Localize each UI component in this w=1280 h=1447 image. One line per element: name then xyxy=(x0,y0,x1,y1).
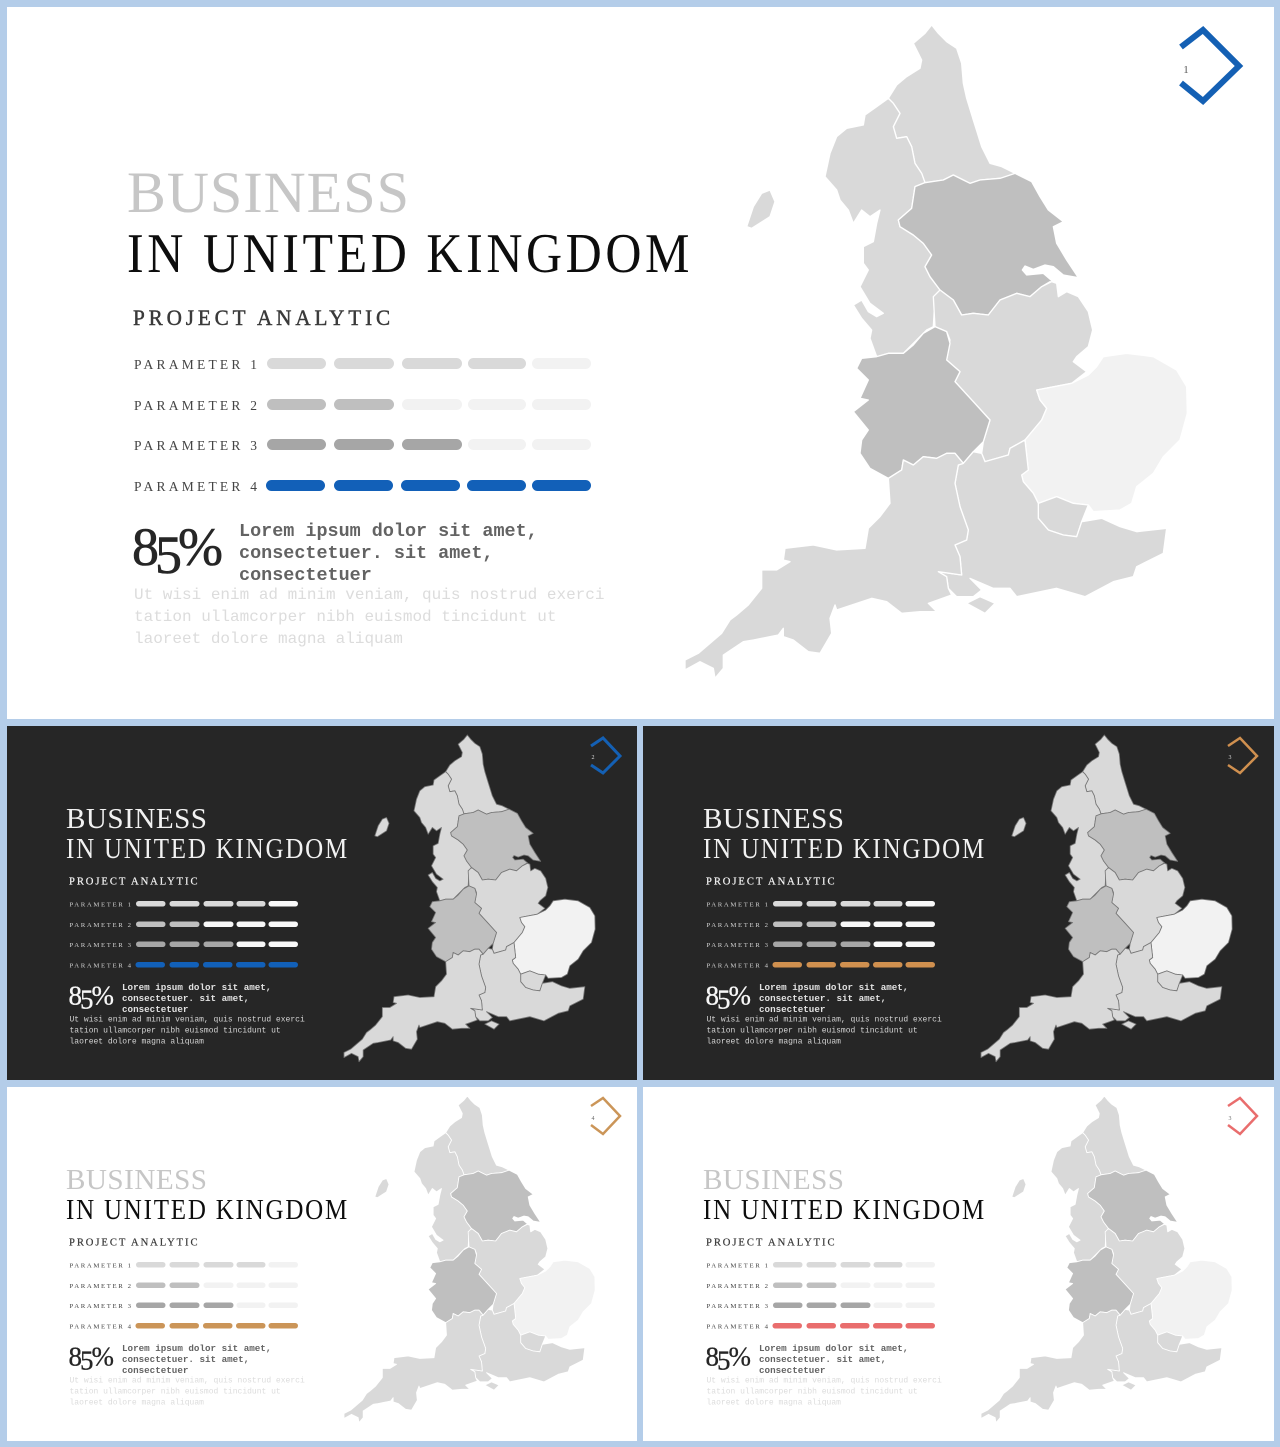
text block: light orange content xyxy=(66,1164,349,1408)
icon: diamond marker 4: 4 xyxy=(592,1116,594,1122)
lorem text xyxy=(239,521,538,586)
parameter 4 row: PARAMETER 4 xyxy=(134,479,257,494)
title xyxy=(703,803,986,865)
region: south east xyxy=(938,440,1167,597)
parameter 1 row xyxy=(70,1262,298,1270)
region: london xyxy=(1038,497,1088,537)
body text: Ut wisi enim ad minim veniam, quis nostrud exerci xyxy=(134,586,604,604)
text block: dark blue content xyxy=(66,803,349,1046)
parameter 2 row xyxy=(134,398,591,413)
parameter 3 row: PARAMETER 3 xyxy=(70,942,132,949)
panel: dark slide orange xyxy=(643,726,1274,1080)
parameter 4 row xyxy=(134,479,591,494)
title xyxy=(127,160,693,285)
stat: 85%: 5 xyxy=(80,1346,94,1376)
icon: diamond marker 3: 3 xyxy=(1228,755,1232,761)
parameter 1 row xyxy=(70,901,298,908)
body text: Ut wisi enim ad minim veniam, quis nostrud exerci xyxy=(706,1376,942,1386)
region: north west xyxy=(825,98,940,357)
panel: main white slide xyxy=(7,7,1274,719)
icon: diamond marker 2 xyxy=(591,738,620,773)
parameter 4 row: PARAMETER 4 xyxy=(70,1324,132,1330)
stat: 85%: % xyxy=(92,980,114,1010)
title: BUSINESS xyxy=(127,160,410,225)
lorem text: consectetuer. sit amet, xyxy=(122,993,249,1004)
region: yorkshire xyxy=(898,173,1078,315)
panel: light slide orange xyxy=(7,1087,637,1441)
map: light red xyxy=(981,1096,1232,1423)
region: east of england xyxy=(1022,353,1187,512)
parameter 2 row xyxy=(70,1282,298,1290)
icon: diamond marker 1: 1 xyxy=(1183,64,1189,76)
title: BUSINESS xyxy=(66,1164,208,1196)
icon: diamond marker 4 xyxy=(591,1098,620,1134)
body text xyxy=(70,1016,305,1046)
title xyxy=(703,1164,986,1226)
icon: diamond marker 5 xyxy=(1228,1098,1257,1134)
stat: 85%: 5 xyxy=(717,984,730,1014)
parameter 1 row: PARAMETER 1 xyxy=(70,1262,131,1270)
stat: 85%: 5 xyxy=(80,984,94,1014)
title xyxy=(66,803,349,865)
body text: tation ullamcorper nibh euismod tincidunt ut xyxy=(706,1026,918,1036)
parameter 2 row: PARAMETER 2 xyxy=(134,398,257,413)
lorem text xyxy=(759,982,908,1015)
map of England regions xyxy=(685,25,1187,678)
body text: Ut wisi enim ad minim veniam, quis nostrud exerci xyxy=(706,1016,942,1024)
parameter 2 row: PARAMETER 2 xyxy=(706,1283,768,1290)
parameter 1 row: PARAMETER 1 xyxy=(70,902,131,908)
region: west midlands xyxy=(853,327,990,478)
heading: project analytic: PROJECT ANALYTIC xyxy=(133,305,394,330)
lorem text: consectetuer. sit amet, xyxy=(759,993,886,1004)
stat: 85%: % xyxy=(178,517,223,577)
title: IN UNITED KINGDOM xyxy=(703,1195,986,1226)
parameter 4 row xyxy=(706,1323,935,1330)
region: north east xyxy=(888,25,1015,183)
parameter 3 row xyxy=(706,942,935,949)
parameter 2 row: PARAMETER 2 xyxy=(70,1283,131,1290)
body text: laoreet dolore magna aliquam xyxy=(706,1038,841,1046)
body text xyxy=(706,1376,942,1408)
parameter 4 row: PARAMETER 4 xyxy=(70,962,132,970)
text block: light red content xyxy=(703,1164,986,1408)
heading: project analytic: PROJECT ANALYTIC xyxy=(706,1236,836,1248)
stat: 85%: 8 xyxy=(706,980,719,1010)
title xyxy=(66,1164,349,1226)
region: south west xyxy=(685,453,968,678)
parameter 1 row: PARAMETER 1 xyxy=(706,1262,768,1270)
text block: analytic content xyxy=(127,160,693,648)
lorem text: Lorem ipsum dolor sit amet, xyxy=(239,521,538,542)
parameter 1 row: PARAMETER 1 xyxy=(706,902,768,908)
parameter 2 row xyxy=(706,1282,935,1290)
title: IN UNITED KINGDOM xyxy=(127,223,693,285)
lorem text: Lorem ipsum dolor sit amet, xyxy=(122,1343,271,1354)
parameter 3 row xyxy=(706,1302,935,1310)
title: IN UNITED KINGDOM xyxy=(66,834,349,865)
heading: project analytic: PROJECT ANALYTIC xyxy=(69,876,200,888)
lorem text: consectetuer xyxy=(759,1365,825,1376)
parameter 2 row xyxy=(706,922,935,929)
lorem text: Lorem ipsum dolor sit amet, xyxy=(122,982,271,993)
body text: tation ullamcorper nibh euismod tincidunt ut xyxy=(70,1388,281,1396)
body text: laoreet dolore magna aliquam xyxy=(70,1398,204,1408)
stat: 85%: 5 xyxy=(155,525,182,585)
icon: diamond marker 5: 3 xyxy=(1228,1116,1232,1122)
parameter 1 row: PARAMETER 1 xyxy=(134,357,257,372)
body text: laoreet dolore magna aliquam xyxy=(706,1398,841,1408)
lorem text xyxy=(759,1343,908,1376)
lorem text: consectetuer. sit amet, xyxy=(759,1354,886,1365)
body text: tation ullamcorper nibh euismod tincidunt ut xyxy=(134,608,556,626)
parameter 3 row xyxy=(70,942,298,949)
title: BUSINESS xyxy=(703,1164,844,1196)
text block: dark orange content xyxy=(703,803,986,1046)
region: isle of wight xyxy=(967,597,995,613)
body text: tation ullamcorper nibh euismod tincidunt ut xyxy=(706,1388,918,1396)
stat: 85%: 5 xyxy=(717,1346,730,1376)
body text xyxy=(70,1376,305,1408)
lorem text xyxy=(122,982,271,1015)
stat: 85%: 8 xyxy=(706,1342,719,1372)
body text xyxy=(134,586,604,648)
parameter 3 row: PARAMETER 3 xyxy=(134,438,257,453)
map: dark blue xyxy=(344,735,595,1062)
icon: diamond marker 1 xyxy=(1181,30,1239,101)
lorem text: consectetuer xyxy=(759,1004,825,1015)
panel: light slide red xyxy=(643,1087,1274,1441)
map: dark orange xyxy=(981,735,1232,1062)
icon: diamond marker 2: 2 xyxy=(592,755,594,761)
parameter 4 row: PARAMETER 4 xyxy=(706,1324,769,1330)
parameter 1 row xyxy=(134,357,591,372)
icon: diamond marker 3 xyxy=(1228,738,1257,773)
region: east midlands xyxy=(933,282,1093,462)
lorem text: consectetuer xyxy=(239,565,372,586)
heading: project analytic: PROJECT ANALYTIC xyxy=(706,876,836,888)
lorem text: consectetuer. sit amet, xyxy=(239,543,493,564)
heading: project analytic: PROJECT ANALYTIC xyxy=(69,1236,200,1248)
stat: 85%: % xyxy=(92,1342,114,1372)
parameter 3 row: PARAMETER 3 xyxy=(706,1303,769,1310)
parameter 4 row xyxy=(70,962,298,970)
parameter 3 row xyxy=(134,438,591,453)
parameter 2 row xyxy=(70,922,298,929)
body text xyxy=(706,1016,942,1046)
body text: laoreet dolore magna aliquam xyxy=(70,1038,204,1046)
map: light orange xyxy=(344,1096,595,1423)
panel: dark slide blue xyxy=(7,726,637,1080)
body text: Ut wisi enim ad minim veniam, quis nostrud exerci xyxy=(70,1016,305,1024)
stat: 85%: 8 xyxy=(68,1342,82,1372)
parameter 2 row: PARAMETER 2 xyxy=(70,922,131,929)
body text: tation ullamcorper nibh euismod tincidunt ut xyxy=(70,1026,281,1036)
title: BUSINESS xyxy=(66,803,208,835)
parameter 4 row xyxy=(706,962,935,970)
parameter 2 row: PARAMETER 2 xyxy=(706,922,768,929)
lorem text: consectetuer xyxy=(122,1004,188,1015)
parameter 1 row xyxy=(706,901,935,908)
parameter 3 row: PARAMETER 3 xyxy=(706,942,769,949)
stat: 85%: 8 xyxy=(132,517,159,577)
stat: 85%: % xyxy=(728,1342,751,1372)
title: IN UNITED KINGDOM xyxy=(66,1195,349,1226)
parameter 1 row xyxy=(706,1262,935,1270)
parameter 3 row xyxy=(70,1302,298,1310)
stat: 85%: 8 xyxy=(68,980,82,1010)
region: isle of man xyxy=(747,190,775,228)
lorem text: Lorem ipsum dolor sit amet, xyxy=(759,1343,908,1354)
parameter 4 row: PARAMETER 4 xyxy=(706,962,769,970)
lorem text xyxy=(122,1343,271,1376)
stat: 85%: % xyxy=(728,980,751,1010)
lorem text: Lorem ipsum dolor sit amet, xyxy=(759,982,908,993)
title: BUSINESS xyxy=(703,803,844,835)
parameter 4 row xyxy=(70,1323,298,1330)
parameter 3 row: PARAMETER 3 xyxy=(70,1303,132,1310)
body text: Ut wisi enim ad minim veniam, quis nostrud exerci xyxy=(70,1376,305,1386)
lorem text: consectetuer. sit amet, xyxy=(122,1354,249,1365)
lorem text: consectetuer xyxy=(122,1365,188,1376)
title: IN UNITED KINGDOM xyxy=(703,834,986,865)
body text: laoreet dolore magna aliquam xyxy=(134,630,403,648)
